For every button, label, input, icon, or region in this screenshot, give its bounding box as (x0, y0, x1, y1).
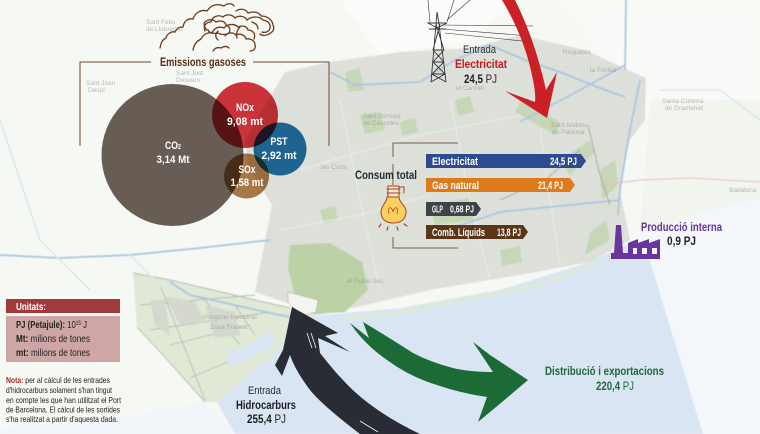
map background: de Gramenet (665, 105, 703, 112)
bubble: CO2 (102, 84, 244, 226)
bar: Gas natural: Gas natural (432, 180, 479, 192)
map background: Sant Andreu (551, 122, 587, 129)
map background: la Trinitat (590, 67, 617, 74)
bubble: PST (254, 122, 306, 176)
map background: el Carmel (456, 85, 484, 92)
label: Produccio interna: 0,9 PJ (667, 234, 696, 248)
bubble labels (156, 102, 297, 189)
bar: GLP (426, 202, 481, 216)
icon: light bulb (379, 186, 407, 230)
label: Produccio interna: Producció interna (641, 220, 722, 234)
bar: Comb. Liquids: Comb. Líquids (432, 227, 485, 239)
header (6, 299, 120, 313)
map background: de Llobregat (146, 26, 182, 33)
map background: de Palomar (552, 129, 586, 136)
text block: nota: Nota: per al càlcul de les entrades (6, 375, 110, 385)
bar: Gas natural (426, 178, 575, 192)
map background: Polígono Industrial (203, 314, 257, 321)
map background: Sant Feliu (146, 19, 176, 26)
map background: de Cassoles (363, 120, 400, 127)
label: Distribucio i exportacions: 220,4 PJ (596, 379, 634, 393)
label: Entrada Hidrocarburs: Entrada (248, 385, 282, 397)
map background: Zona Franca (210, 324, 247, 331)
label: Produccio interna (641, 220, 722, 248)
icon: electricity pylon (428, 0, 533, 82)
map background: Despí (88, 87, 105, 94)
text block: nota: en compte les que han utilitzat el Port (6, 395, 122, 405)
text block: nota: de Barcelona. El càlcul de les sortides (6, 404, 120, 414)
bar: Gas natural: 21,4 PJ (538, 180, 563, 192)
label: Entrada Hidrocarburs: Hidrocarburs (236, 398, 296, 412)
heading: Consum total (355, 168, 417, 182)
bubble: NOx (212, 82, 278, 148)
map background: el Poble Sec (347, 278, 384, 285)
icon: factory (611, 225, 660, 259)
label: Entrada Electricitat: Entrada (463, 44, 497, 56)
map background: les Corts (321, 164, 347, 171)
label: Distribucio i exportacions: Distribució i exportacions (545, 364, 664, 378)
panel: Unitats: 15 (76, 321, 81, 327)
bubble chart: emissions (102, 82, 306, 226)
body (6, 316, 120, 362)
text block: nota: d'hidrocarburs solament s'han tingut (6, 385, 112, 395)
bar: Comb. Liquids: 13,8 PJ (497, 227, 521, 239)
text block: nota (6, 375, 122, 424)
label: Entrada Hidrocarburs (236, 385, 296, 426)
map background: Santa Coloma (662, 98, 704, 105)
bar: Electricitat: 24,5 PJ (550, 156, 577, 168)
bubble labels: 1,58 mt (230, 177, 264, 189)
map background: Sant Joan (86, 80, 116, 87)
label: Entrada Hidrocarburs: 255,4 PJ (247, 412, 286, 426)
panel: Unitats (6, 299, 120, 362)
heading: Emissions gasoses: Emissions gasoses (160, 55, 246, 69)
label: Entrada Electricitat: Electricitat (455, 57, 507, 71)
bar: GLP: 0,68 PJ (450, 204, 474, 216)
bubble labels: 2,92 mt (262, 150, 297, 162)
map background: Desvern (176, 77, 201, 84)
heading: Emissions gasoses (80, 55, 329, 146)
arrow: hydrocarbons in (275, 307, 420, 434)
panel: Unitats: J (81, 320, 87, 331)
bubble labels: SOx (238, 164, 256, 176)
panel: Unitats: mt: milions de tones (16, 348, 90, 359)
text block: nota: s'ha realitzat a partir d'aquesta dada. (6, 414, 118, 424)
panel: Consum total (355, 143, 586, 248)
map background: Sant Just (176, 70, 203, 77)
bubble: SOx (224, 154, 269, 198)
panel: Unitats: Unitats: (16, 301, 46, 313)
bar: Comb. Liquids (426, 225, 528, 239)
panel: Unitats: Mt: milions de tones (16, 334, 90, 345)
map background: Badalona (729, 187, 757, 194)
bubble labels: NOx (236, 102, 255, 114)
map background: Sant Gervasi (363, 113, 401, 120)
label: Entrada Electricitat (455, 44, 507, 86)
bubble labels: PST (270, 136, 288, 148)
arrow: electricity in (502, 0, 557, 118)
label: Entrada Electricitat: 24,5 PJ (464, 72, 497, 86)
bubble labels: 9,08 mt (227, 116, 263, 128)
bubble labels: 3,14 Mt (156, 154, 190, 166)
bar: Electricitat: Electricitat (432, 156, 478, 168)
bubble labels: CO2 (165, 140, 181, 152)
bar: GLP: GLP (432, 204, 443, 216)
bar: Electricitat (426, 154, 586, 168)
panel: Unitats: PJ (Petajule): 10 (16, 320, 79, 331)
map background: Roquetes (563, 49, 592, 56)
illustration: smoke cloud (160, 4, 274, 51)
bracket (393, 143, 458, 248)
label: Distribucio i exportacions (545, 364, 664, 393)
arrow: distribution out (350, 322, 528, 422)
